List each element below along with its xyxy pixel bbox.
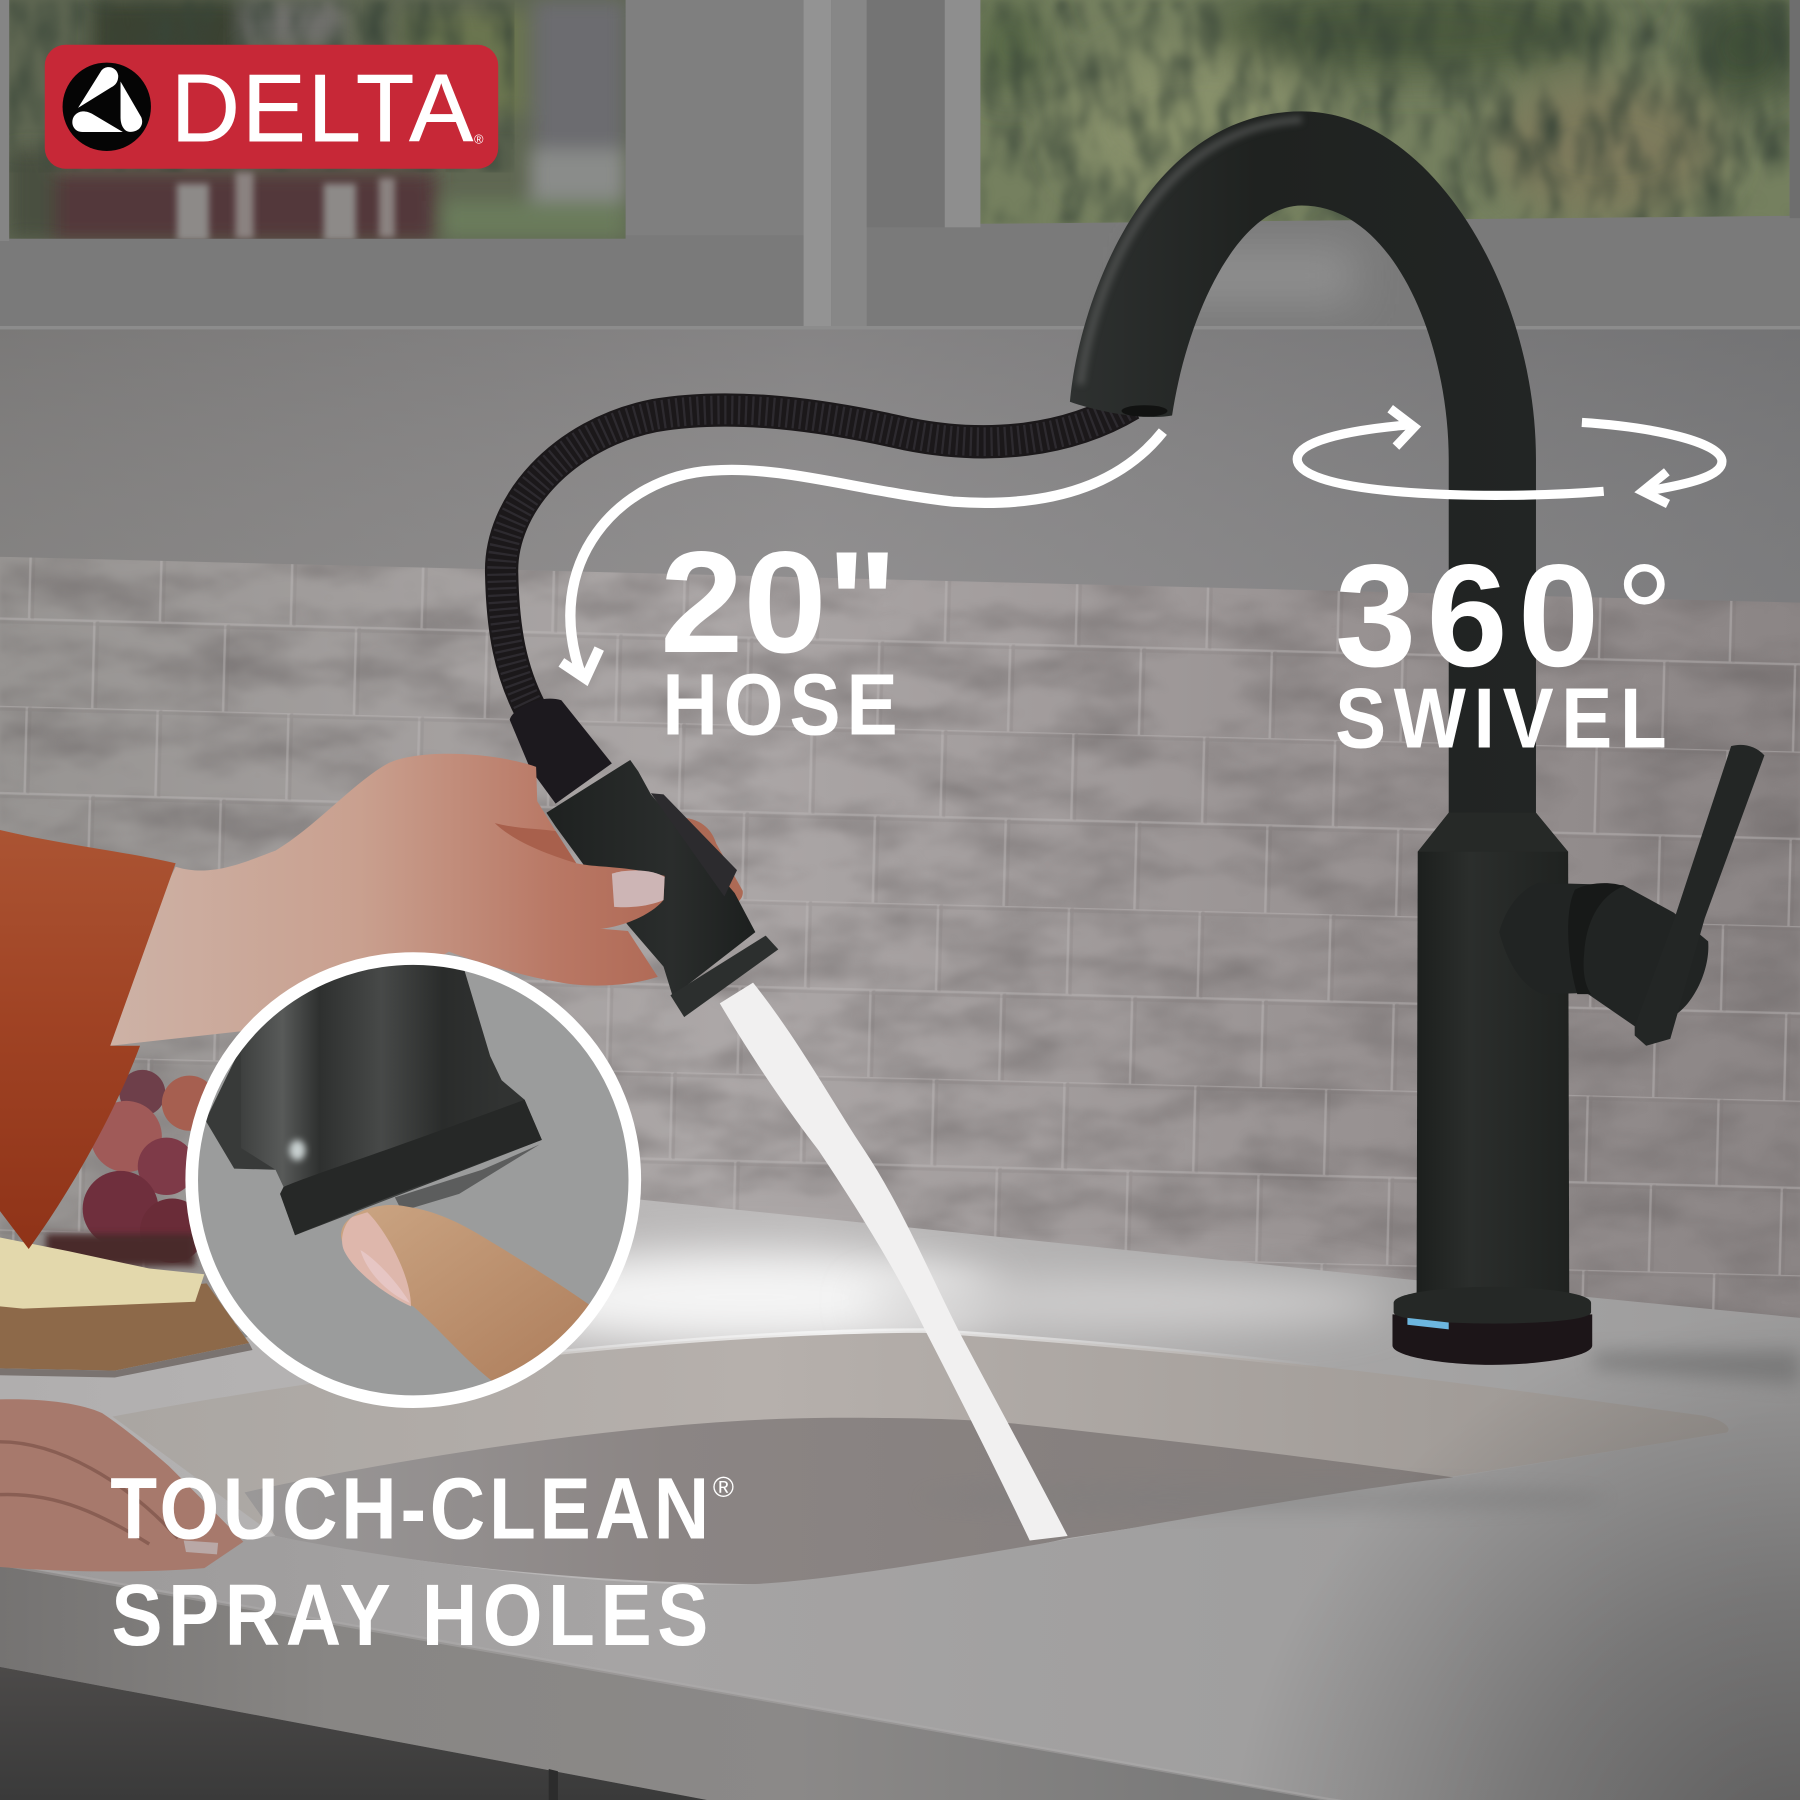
heading: Touch-Clean spray holes: SPRAY HOLES <box>111 1568 708 1664</box>
heading: 360 degree swivel: 360 <box>1335 534 1599 697</box>
heading: 20 inch hose: 20" <box>660 521 898 683</box>
logo: Delta <box>45 45 498 169</box>
inset finger pressing the spray holes <box>341 1205 590 1382</box>
background: right window view <box>976 0 1800 224</box>
arrow: hose length <box>561 432 1163 678</box>
background: countertop front surface <box>0 1309 1800 1800</box>
callout: spray-hole detail inset <box>189 953 637 1404</box>
background: countertop back surface <box>0 1200 1800 1800</box>
heading: Touch-Clean spray holes: ® <box>713 1472 734 1504</box>
heading: 360 degree swivel <box>1335 534 1673 766</box>
logo: Delta: ® <box>474 132 484 146</box>
fingertips behind spray head <box>677 817 743 904</box>
background: counter front edge <box>0 1561 1343 1800</box>
hand holding spray head <box>110 754 665 1046</box>
background: cabinet below counter <box>0 1667 707 1800</box>
background: marble brick backsplash <box>0 551 1800 1343</box>
braided hose <box>502 404 1131 709</box>
heading: 360 degree swivel: ° <box>1615 534 1673 697</box>
spray hose collar <box>510 699 612 804</box>
cutting board with cheese <box>0 1238 253 1378</box>
logo: Delta: DELTA <box>171 56 473 162</box>
faucet lever handle <box>1499 745 1764 1046</box>
lower hand at left <box>0 1399 243 1571</box>
background: left window view <box>9 0 626 241</box>
heading: Touch-Clean spray holes <box>110 1461 734 1664</box>
arrows: swivel rotation <box>1297 409 1722 504</box>
water stream <box>720 983 1068 1541</box>
heading: 20 inch hose <box>660 521 898 754</box>
background: sink basin <box>112 1330 1729 1584</box>
faucet body <box>1417 813 1569 1303</box>
heading: 360 degree swivel: SWIVEL <box>1335 672 1667 766</box>
background: plain wall band <box>0 326 1800 608</box>
faucet gooseneck spout <box>1070 111 1536 817</box>
inset nozzle close-up <box>205 953 590 1382</box>
background: upper wall and window frame <box>0 0 1800 333</box>
grapes <box>46 1070 217 1266</box>
icon: Delta triangle mark <box>63 63 151 151</box>
pull-down spray head <box>546 760 778 1017</box>
heading: Touch-Clean spray holes: TOUCH-CLEAN <box>110 1461 709 1557</box>
faucet base with blue indicator light <box>1392 1287 1592 1365</box>
sleeve <box>0 830 176 1249</box>
heading: 20 inch hose: HOSE <box>662 657 898 754</box>
